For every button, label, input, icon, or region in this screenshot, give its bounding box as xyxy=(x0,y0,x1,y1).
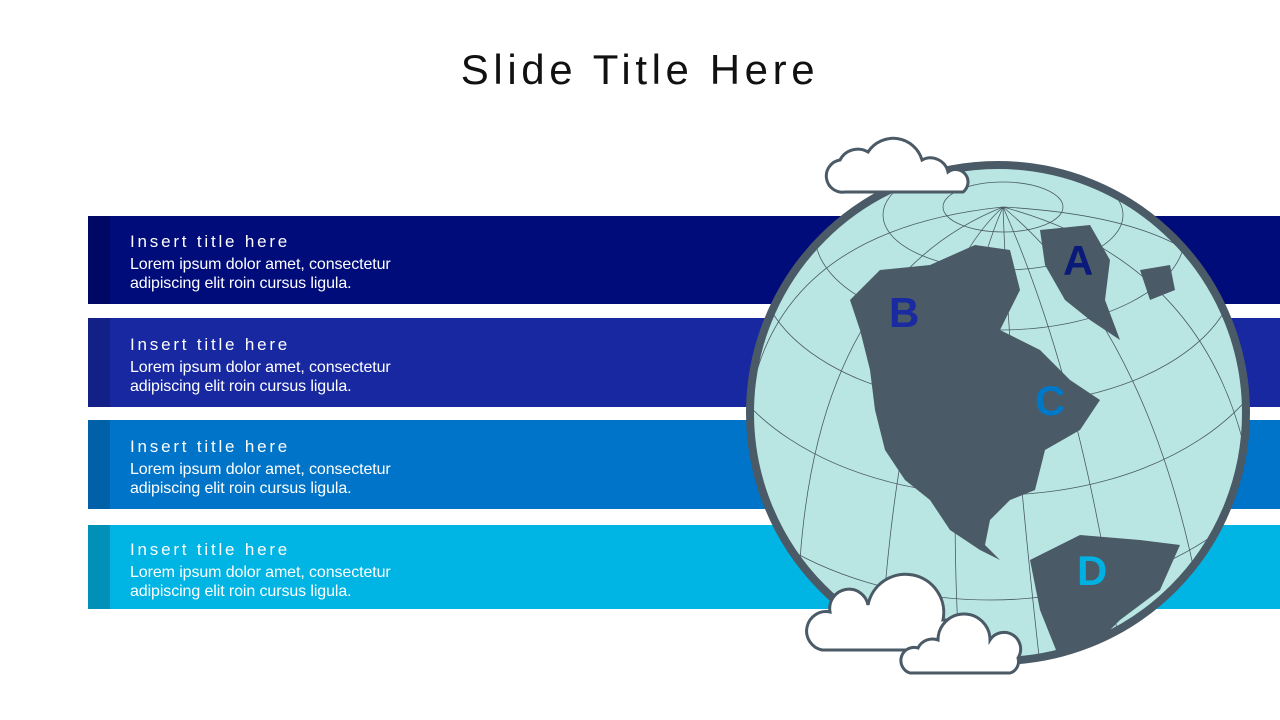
bar 3 title: Insert title here xyxy=(130,437,290,456)
letters: B xyxy=(889,289,919,336)
bar 4 xyxy=(88,525,1280,609)
bar 2 title: Insert title here xyxy=(130,335,290,354)
bar 3 text: adipiscing elit roin cursus ligula. xyxy=(130,480,352,497)
bar 1 text: Lorem ipsum dolor amet, consectetur xyxy=(130,256,391,273)
bar 2 xyxy=(88,318,1280,407)
title: Slide Title Here xyxy=(461,46,819,93)
bar 4 text: adipiscing elit roin cursus ligula. xyxy=(130,583,352,600)
bar 2 text xyxy=(130,359,391,395)
continents xyxy=(850,225,1180,660)
letters: A xyxy=(1063,237,1093,284)
bar 1 text: adipiscing elit roin cursus ligula. xyxy=(130,275,352,292)
bar 1 xyxy=(88,216,1280,304)
bar 2 text: Lorem ipsum dolor amet, consectetur xyxy=(130,359,391,376)
bar 4 text xyxy=(130,564,391,600)
bar 4 text: Lorem ipsum dolor amet, consectetur xyxy=(130,564,391,581)
bar 3 text xyxy=(130,461,391,497)
globe xyxy=(746,161,1250,664)
bar 1 title: Insert title here xyxy=(130,232,290,251)
bar 3 text: Lorem ipsum dolor amet, consectetur xyxy=(130,461,391,478)
bar 4 title: Insert title here xyxy=(130,540,290,559)
bar 1 text xyxy=(130,256,391,292)
bar 3 xyxy=(88,420,1280,509)
letters: D xyxy=(1077,547,1107,594)
letters: C xyxy=(1035,377,1065,424)
letters xyxy=(889,237,1107,594)
bar 2 text: adipiscing elit roin cursus ligula. xyxy=(130,378,352,395)
